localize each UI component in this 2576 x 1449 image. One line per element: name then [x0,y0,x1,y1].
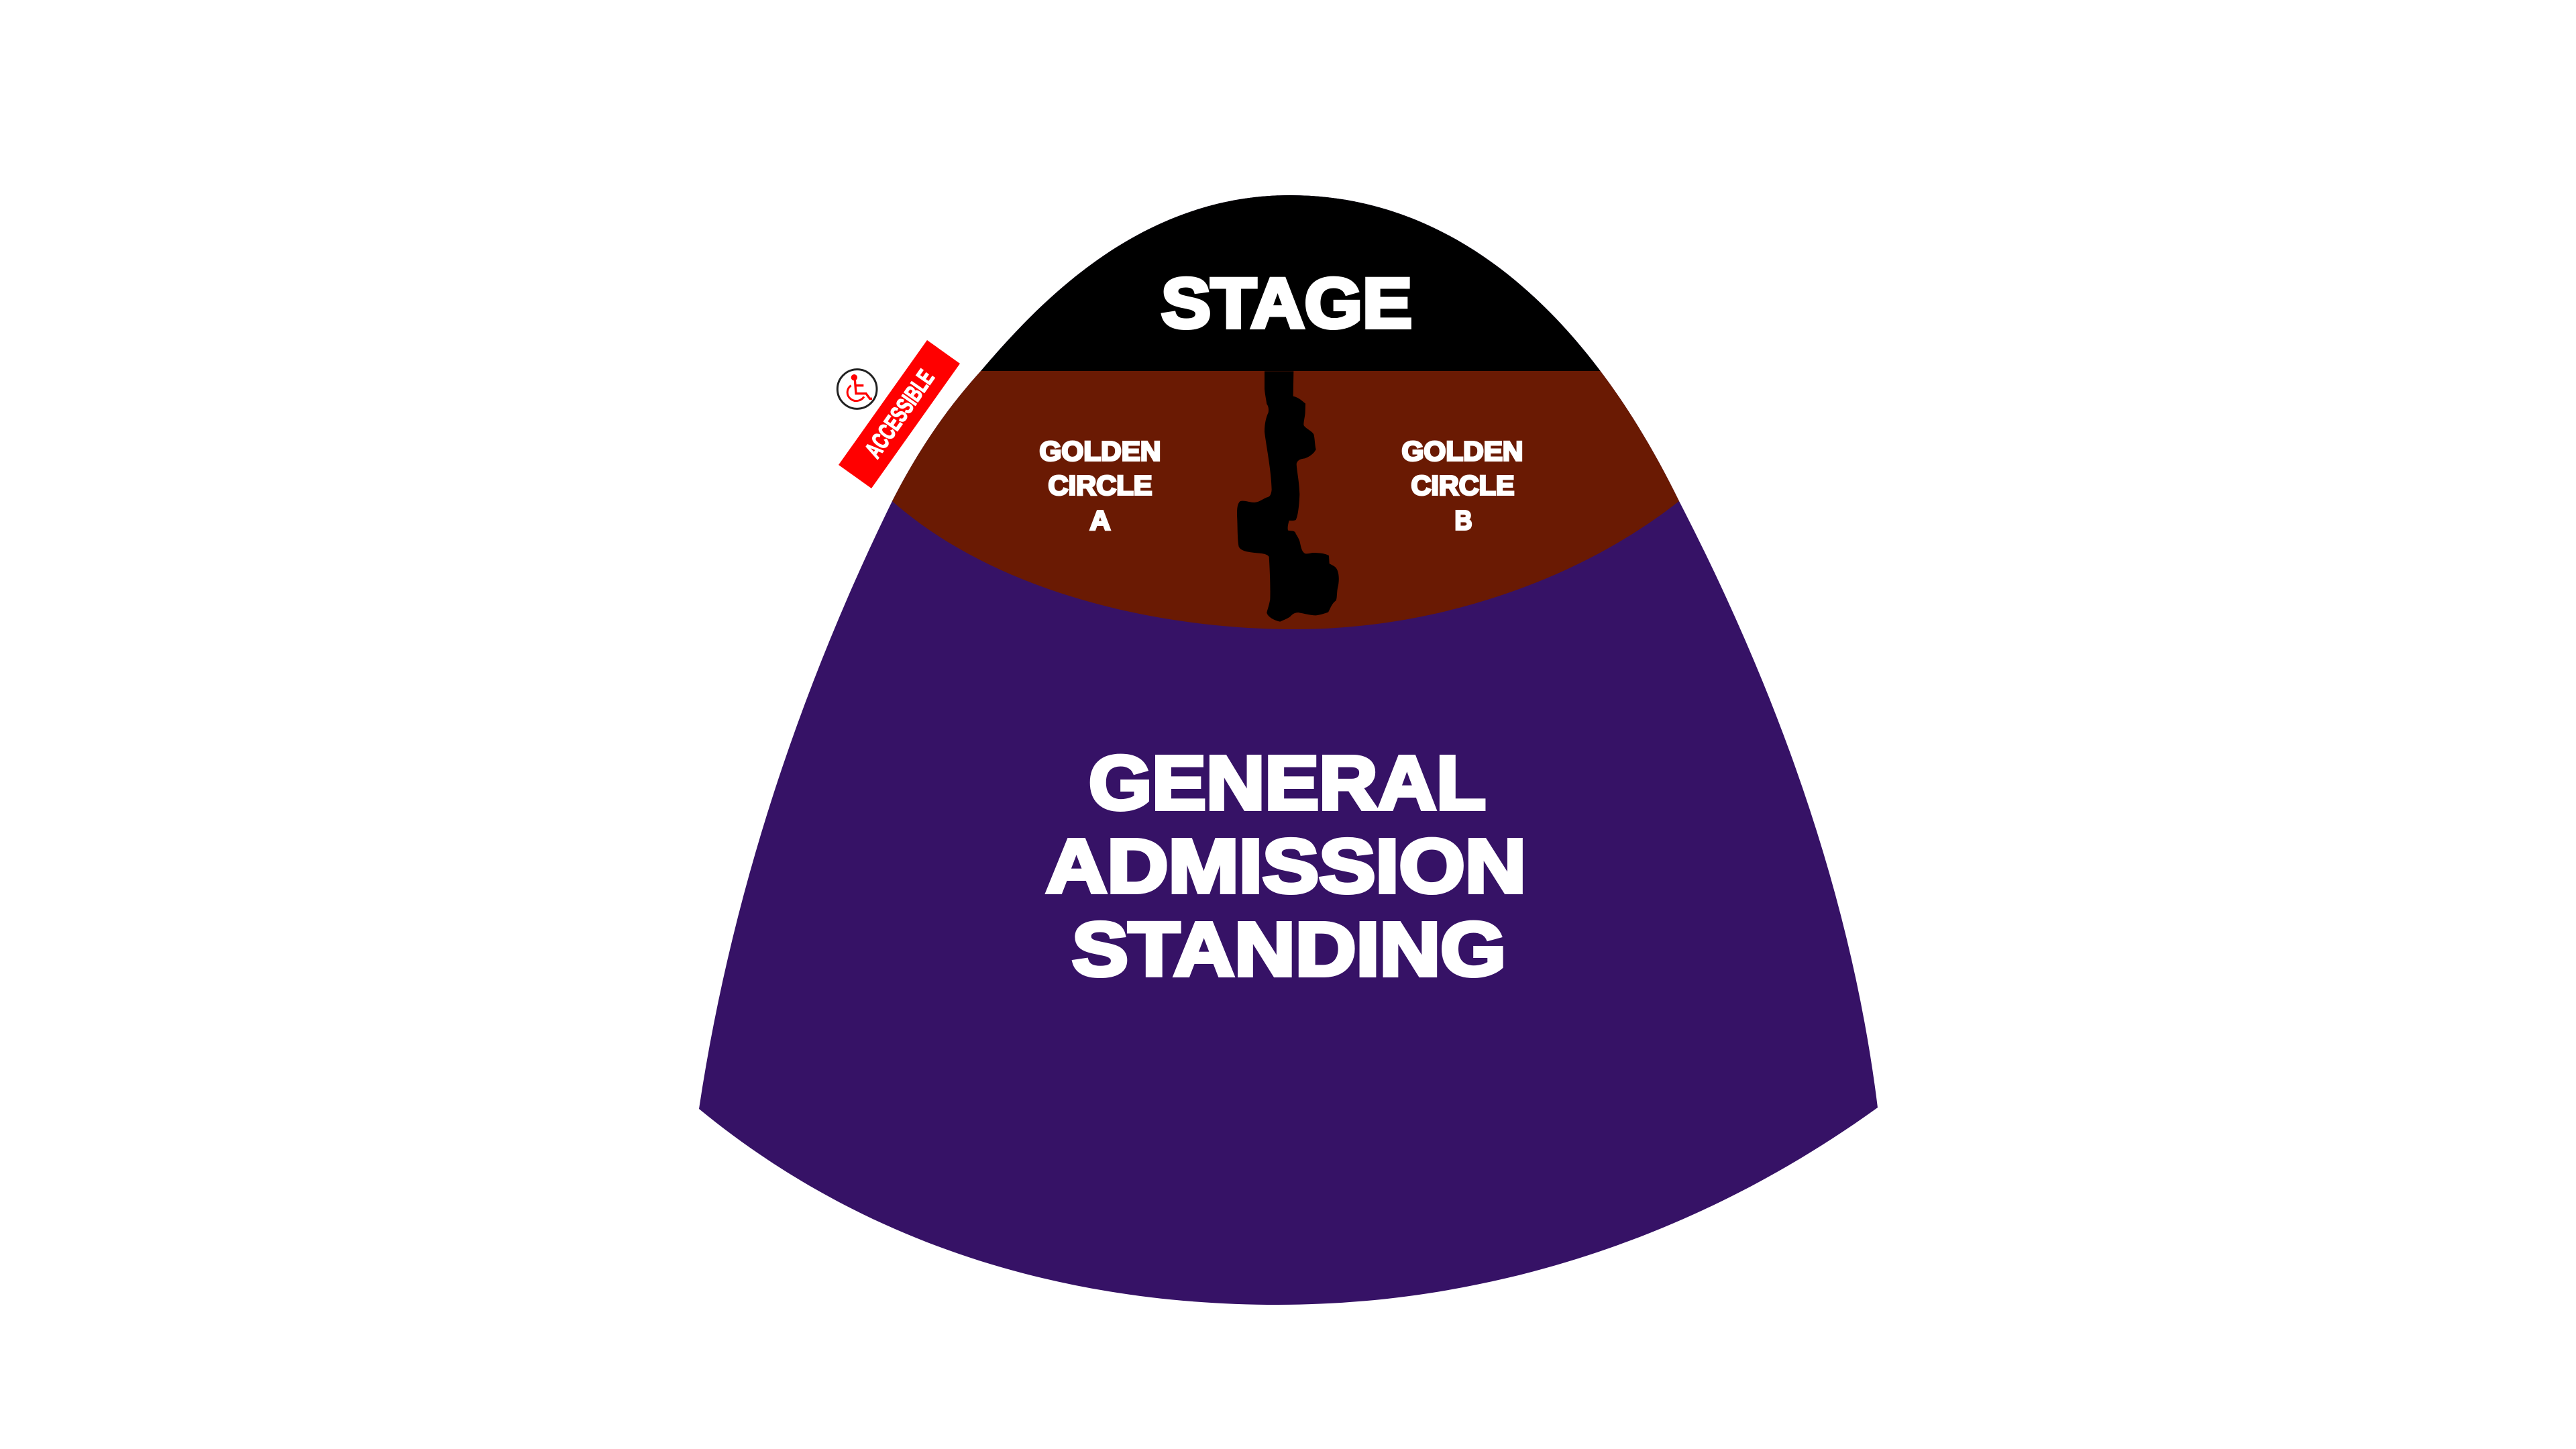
heading: general admission standing: ADMISSION [1046,824,1526,908]
label: golden circle a: GOLDEN [1040,436,1161,467]
label: golden circle b: B [1454,504,1472,535]
stage thrust catwalk [1237,371,1339,622]
panel: general admission standing [699,195,1878,1305]
heading: general admission standing [1046,741,1526,991]
label: golden circle b: CIRCLE [1411,470,1515,500]
label: golden circle a [1040,436,1161,535]
panel: stage [981,195,1601,371]
heading: general admission standing: GENERAL [1089,741,1486,825]
seating map [699,195,1878,1305]
heading: general admission standing: STANDING [1072,907,1506,991]
label: accessible: ACCESSIBLE [859,365,939,463]
label: golden circle a: CIRCLE [1048,470,1152,500]
icon: wheelchair [837,370,877,409]
heading: stage: STAGE [1161,264,1412,343]
label: golden circle b [1402,436,1523,535]
panel: golden circle [865,370,1717,629]
label: golden circle a: A [1089,504,1111,535]
label: golden circle b: GOLDEN [1402,436,1523,467]
accessible tag [839,340,960,488]
